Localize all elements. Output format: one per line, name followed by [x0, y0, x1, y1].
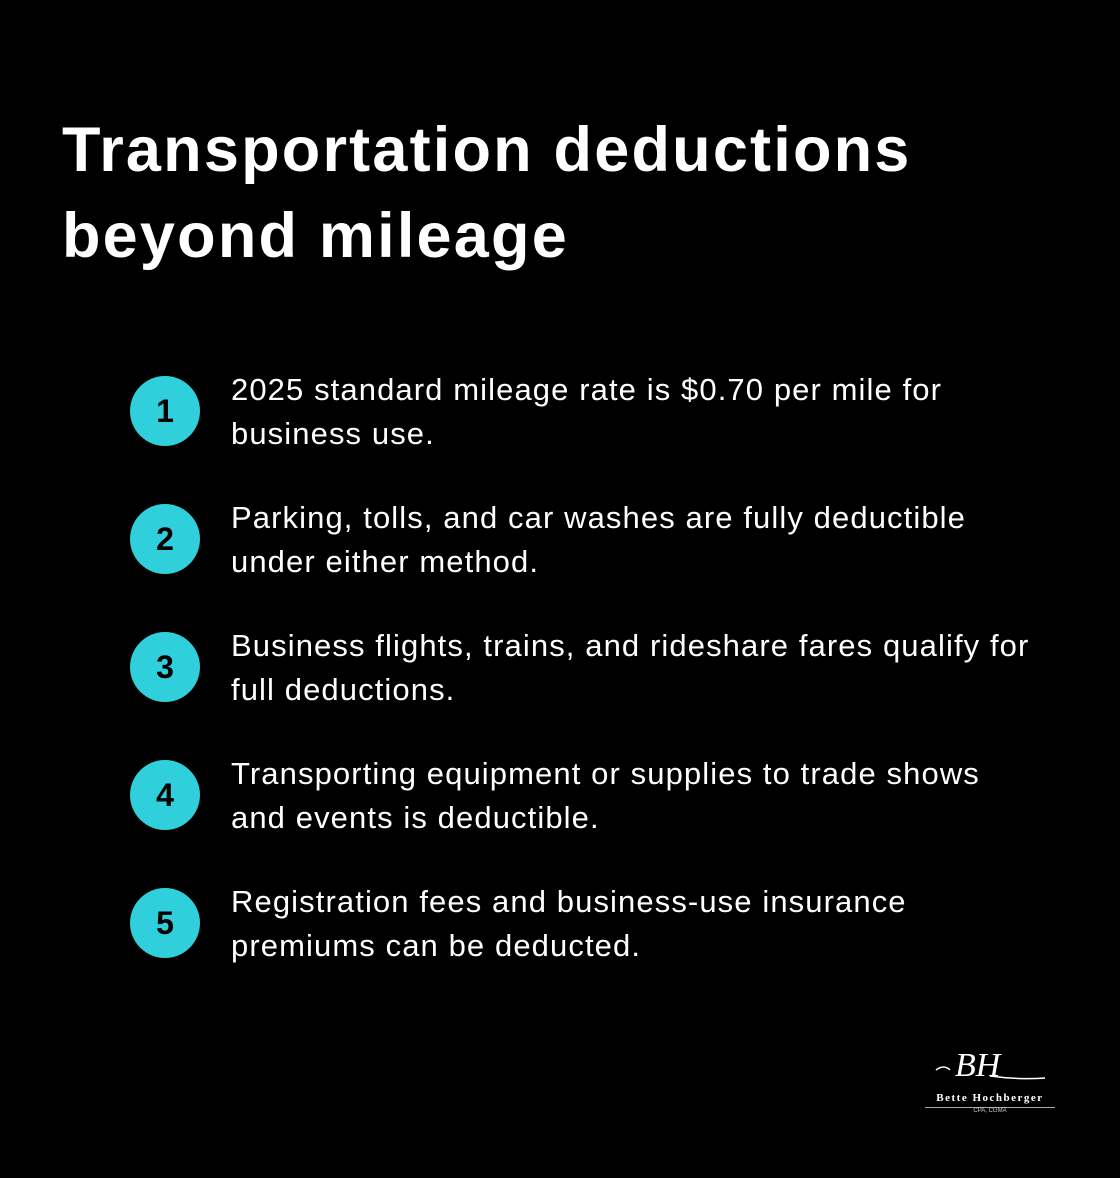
item 4: 4 [156, 777, 174, 813]
item 1: 1 [156, 393, 174, 429]
item 4: Transporting equipment or supplies to trade shows [231, 756, 980, 791]
title [62, 115, 912, 271]
item 2: 2 [156, 521, 174, 557]
item 3: Business flights, trains, and rideshare fares qualify for [231, 628, 1029, 663]
item 1: 2025 standard mileage rate is $0.70 per mile for [231, 372, 942, 407]
item 4: and events is deductible. [231, 800, 600, 835]
logo: Bette Hochberger [936, 1092, 1044, 1104]
title: beyond mileage [62, 201, 569, 271]
item 5 [130, 884, 907, 963]
item 4 [130, 756, 980, 835]
logo [925, 1047, 1055, 1114]
title: Transportation deductions [62, 115, 912, 185]
item 3: 3 [156, 649, 174, 685]
item 1 [130, 372, 942, 451]
item 5: 5 [156, 905, 174, 941]
logo: BH [955, 1047, 1003, 1084]
item 3 [130, 628, 1029, 707]
item 3: full deductions. [231, 672, 455, 707]
item 5: Registration fees and business-use insurance [231, 884, 907, 919]
item 2: under either method. [231, 544, 539, 579]
item 5: premiums can be deducted. [231, 928, 641, 963]
item 2 [130, 500, 966, 579]
item 1: business use. [231, 416, 435, 451]
item 2: Parking, tolls, and car washes are fully deductible [231, 500, 966, 535]
logo: CPA, CGMA [973, 1108, 1007, 1114]
